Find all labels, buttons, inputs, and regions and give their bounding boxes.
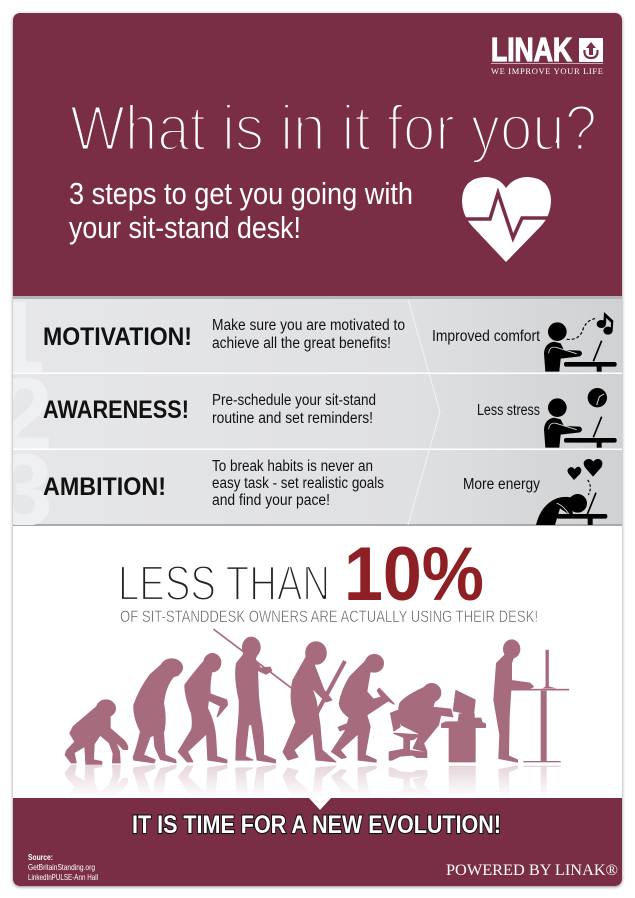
step 3: ambition: AMBITION! bbox=[43, 473, 166, 501]
statistic heading: LESS THAN bbox=[118, 557, 330, 611]
step 3: ambition: easy task - set realistic goals bbox=[212, 475, 384, 492]
subtitle: 3 steps to get you going with bbox=[69, 176, 413, 211]
step 3: ambition: More energy bbox=[463, 476, 540, 493]
step 1: motivation: MOTIVATION! bbox=[43, 323, 192, 351]
step 2: awareness: routine and set reminders! bbox=[212, 410, 373, 427]
step 2: awareness: AWARENESS! bbox=[43, 396, 189, 424]
watermark numbers bbox=[13, 302, 49, 525]
statistic heading bbox=[118, 532, 538, 626]
step 1: motivation: Make sure you are motivated to bbox=[212, 317, 405, 334]
icon: person at desk with music note bbox=[544, 312, 617, 372]
icon: person slumped at desk with hearts bbox=[536, 459, 607, 525]
call to action: IT IS TIME FOR A NEW EVOLUTION! bbox=[132, 811, 501, 839]
logo: LINAK: LINAK bbox=[491, 31, 572, 68]
step 1: motivation: Improved comfort bbox=[432, 328, 541, 345]
panel: three steps bbox=[13, 296, 622, 526]
subtitle: your sit-stand desk! bbox=[69, 210, 301, 245]
sources: Source: bbox=[28, 853, 53, 862]
logo: LINAK: WE IMPROVE YOUR LIFE bbox=[491, 66, 603, 76]
step 3: ambition: and find your pace! bbox=[212, 492, 330, 509]
panel: header bbox=[13, 13, 622, 296]
pointer notch bbox=[309, 798, 331, 810]
chevron divider bbox=[408, 299, 440, 525]
step 1: motivation: achieve all the great benefits! bbox=[212, 335, 391, 352]
icon: person at desk with clock bbox=[544, 388, 617, 448]
panel: footer bbox=[13, 798, 622, 886]
sources bbox=[28, 853, 98, 882]
step 2: awareness: Pre-schedule your sit-stand bbox=[212, 392, 376, 409]
step 2: awareness bbox=[43, 392, 540, 427]
illustration: evolution of man to sit-stand desk bbox=[64, 628, 570, 792]
figure reflections bbox=[64, 764, 561, 792]
title: What is in it for you? bbox=[70, 92, 597, 164]
step 3: ambition: To break habits is never an bbox=[212, 458, 373, 475]
subtitle bbox=[69, 176, 413, 245]
powered by: POWERED BY LINAK® bbox=[446, 862, 618, 879]
icon: heart with pulse bbox=[460, 177, 553, 262]
statistic heading: 10% bbox=[344, 532, 484, 617]
step 2: awareness: Less stress bbox=[477, 402, 540, 419]
step 1: motivation bbox=[43, 317, 541, 352]
sources: LinkedInPULSE-Ann Hall bbox=[28, 872, 98, 882]
step 3: ambition bbox=[43, 458, 540, 509]
sources: GetBritainStanding.org bbox=[28, 862, 95, 872]
